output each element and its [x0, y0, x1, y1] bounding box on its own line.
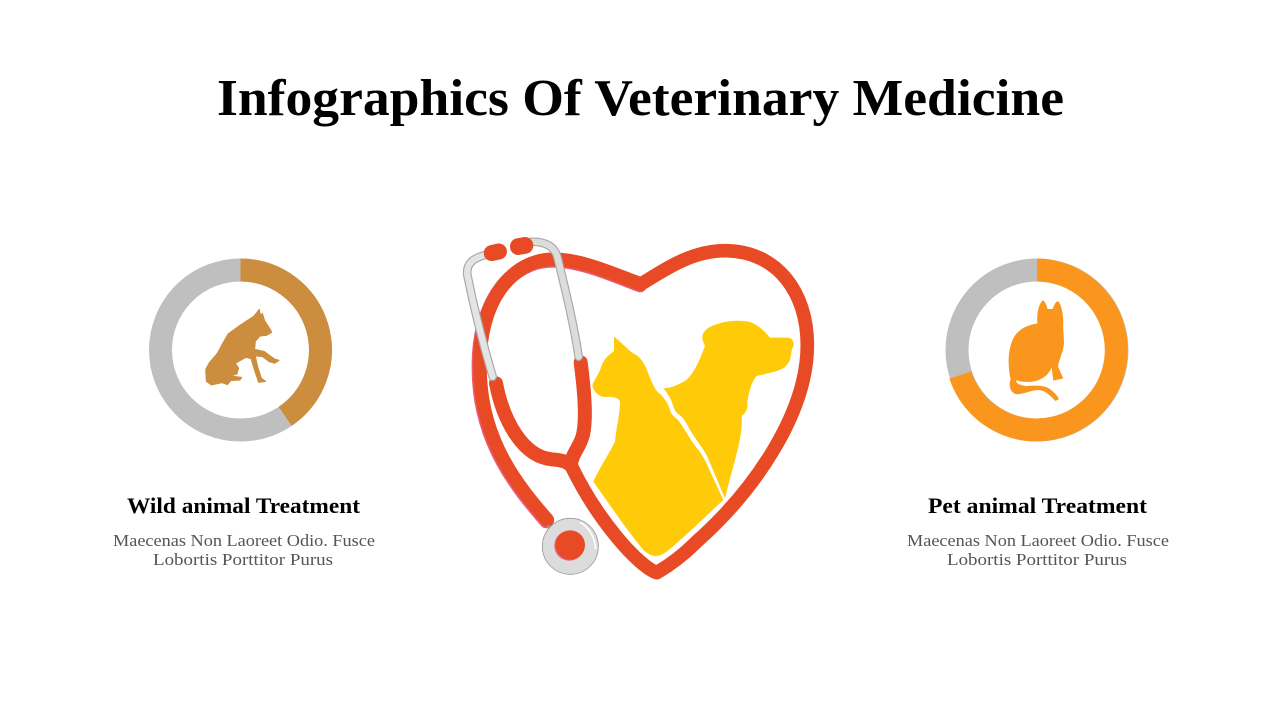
icon: left ear tip [482, 242, 508, 263]
text block: wild animal description [113, 531, 375, 569]
icon: dog silhouette [206, 309, 279, 385]
panel: wild animal treatment [113, 270, 375, 569]
icon: cat silhouette [1009, 300, 1064, 401]
text block: pet animal description: Lobortis Porttitor Purus [947, 550, 1127, 569]
stethoscope right ear tube [532, 242, 579, 357]
donut chart: pet animal [957, 270, 1117, 430]
stethoscope left branch [496, 383, 572, 467]
heading: wild animal treatment: Wild animal Treatment [127, 493, 361, 518]
heart outline shadow [479, 261, 640, 521]
title: Infographics Of Veterinary Medicine [217, 70, 1064, 127]
donut chart: wild animal [160, 270, 320, 430]
text block: wild animal description: Maecenas Non Laoreet Odio. Fusce [113, 531, 375, 550]
heart outline with tube [480, 251, 807, 573]
text block: wild animal description: Lobortis Porttitor Purus [153, 550, 333, 569]
stethoscope right branch [571, 362, 585, 465]
text block: pet animal description [907, 531, 1169, 569]
illustration: heart stethoscope with pets [467, 236, 807, 574]
text block: pet animal description: Maecenas Non Laoreet Odio. Fusce [907, 531, 1169, 550]
icon: right ear tip [509, 236, 535, 256]
heading: pet animal treatment: Pet animal Treatment [928, 493, 1148, 518]
icon: cat silhouette yellow [593, 337, 723, 556]
icon: dog silhouette yellow [663, 321, 794, 498]
panel: pet animal treatment [907, 270, 1169, 569]
stethoscope left ear tube [467, 255, 493, 377]
icon: chest piece [542, 518, 598, 574]
